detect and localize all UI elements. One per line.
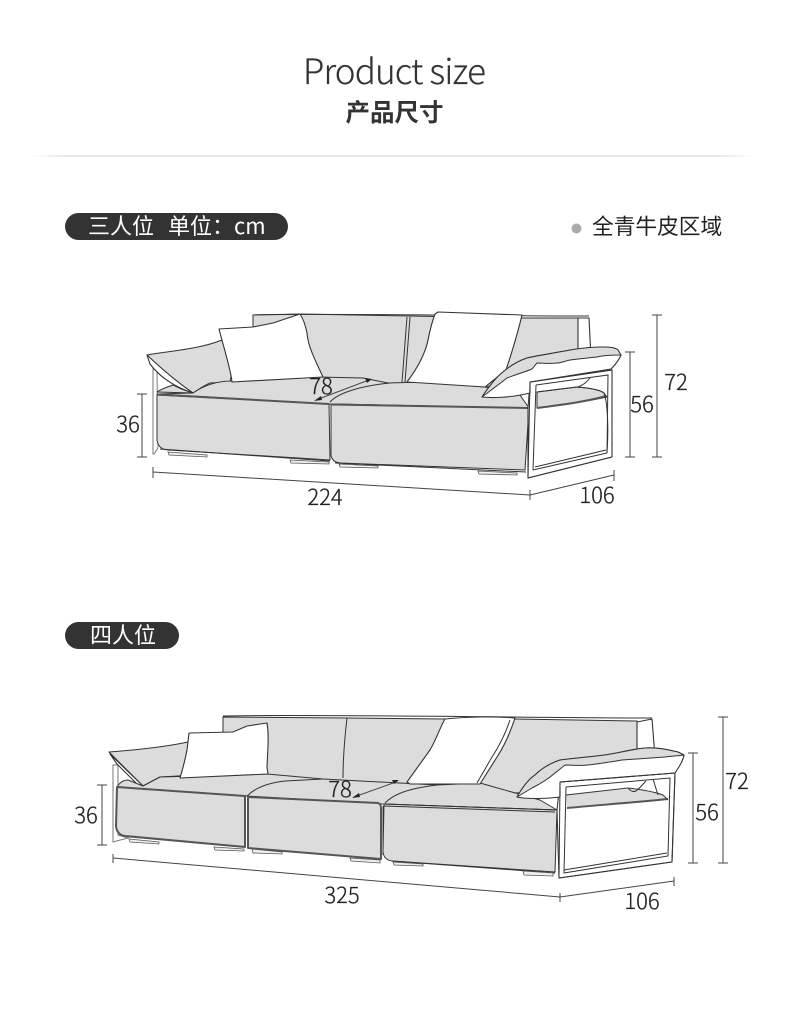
dimension: depth 78: 78 <box>328 772 352 804</box>
dimension: width 325: 325 <box>324 878 360 910</box>
seat cushions <box>117 774 557 810</box>
left pillow <box>180 723 268 778</box>
dimension: depth 106 <box>560 877 674 916</box>
sofa back <box>253 314 600 390</box>
dimension: width 325 <box>113 854 560 910</box>
dimension: depth 78 <box>328 772 399 804</box>
sofa: four-seat line drawing <box>109 715 684 878</box>
legs <box>129 839 553 876</box>
left arm frame <box>113 765 128 842</box>
dimension: depth 78: 78 <box>309 369 333 401</box>
dimension: arm height 56 <box>688 753 719 863</box>
right arm side panel <box>528 370 612 478</box>
arm pillow grey top <box>482 347 621 397</box>
dimension: total height 72 <box>718 717 749 863</box>
dimension: arm height 56: 56 <box>630 387 654 419</box>
dimension: seat height 36: 36 <box>74 798 98 830</box>
right arm frame <box>559 773 675 878</box>
front block two <box>248 797 381 859</box>
front block three <box>383 804 557 872</box>
right pillow <box>407 717 515 784</box>
sofa: three-seat line drawing <box>147 312 621 478</box>
dimension: depth 78 <box>309 369 372 401</box>
dimension: depth 106: 106 <box>624 884 660 916</box>
back divider <box>402 317 410 382</box>
arm pillow grey top <box>517 748 684 797</box>
right arm side panel <box>557 773 675 878</box>
legend: full-grain leather area: 全青牛皮区域 <box>592 210 722 241</box>
dimension: depth 106 <box>530 470 615 510</box>
subtitle: 产品尺寸: 产品尺寸 <box>346 94 444 129</box>
dimension: width 224 <box>153 467 530 512</box>
dimension: width 224: 224 <box>307 480 343 512</box>
left arm cushion <box>109 742 195 786</box>
dimension: arm height 56 <box>625 352 654 457</box>
dimension: total height 72 <box>652 315 688 457</box>
front block one <box>116 787 245 847</box>
label pill: three-seat and unit: cm <box>234 209 266 241</box>
label pill: three-seat and unit: 三人位 <box>88 209 154 241</box>
arm pillow white underside <box>482 347 621 398</box>
back divider <box>343 718 347 778</box>
dimension: total height 72: 72 <box>725 764 749 796</box>
sofa back <box>223 717 650 795</box>
left front block <box>157 395 330 460</box>
label pill: three-seat and unit <box>65 209 288 241</box>
left pillow <box>219 314 323 382</box>
left arm cushion <box>147 340 232 393</box>
title: Product size: Product size <box>303 44 485 95</box>
legs <box>168 452 517 475</box>
dimension: depth 106: 106 <box>579 478 615 510</box>
right pillow <box>407 312 522 387</box>
seat cushions <box>157 377 529 408</box>
dimension: arm height 56: 56 <box>695 795 719 827</box>
right front block <box>331 404 529 470</box>
label pill: four-seat: 四人位 <box>90 618 156 650</box>
dimension: seat height 36: 36 <box>116 407 140 439</box>
dimension: total height 72: 72 <box>664 365 688 397</box>
right arm frame <box>528 370 612 478</box>
dimension: seat height 36 <box>116 394 147 457</box>
dimension: seat height 36 <box>74 785 107 845</box>
label pill: three-seat and unit: 单位： <box>168 209 234 241</box>
seat seen through frame <box>566 789 668 808</box>
left arm frame post <box>153 369 158 454</box>
arm pillow white underside <box>517 748 684 798</box>
seat seen through frame <box>537 387 607 408</box>
label pill: four-seat <box>65 618 179 650</box>
